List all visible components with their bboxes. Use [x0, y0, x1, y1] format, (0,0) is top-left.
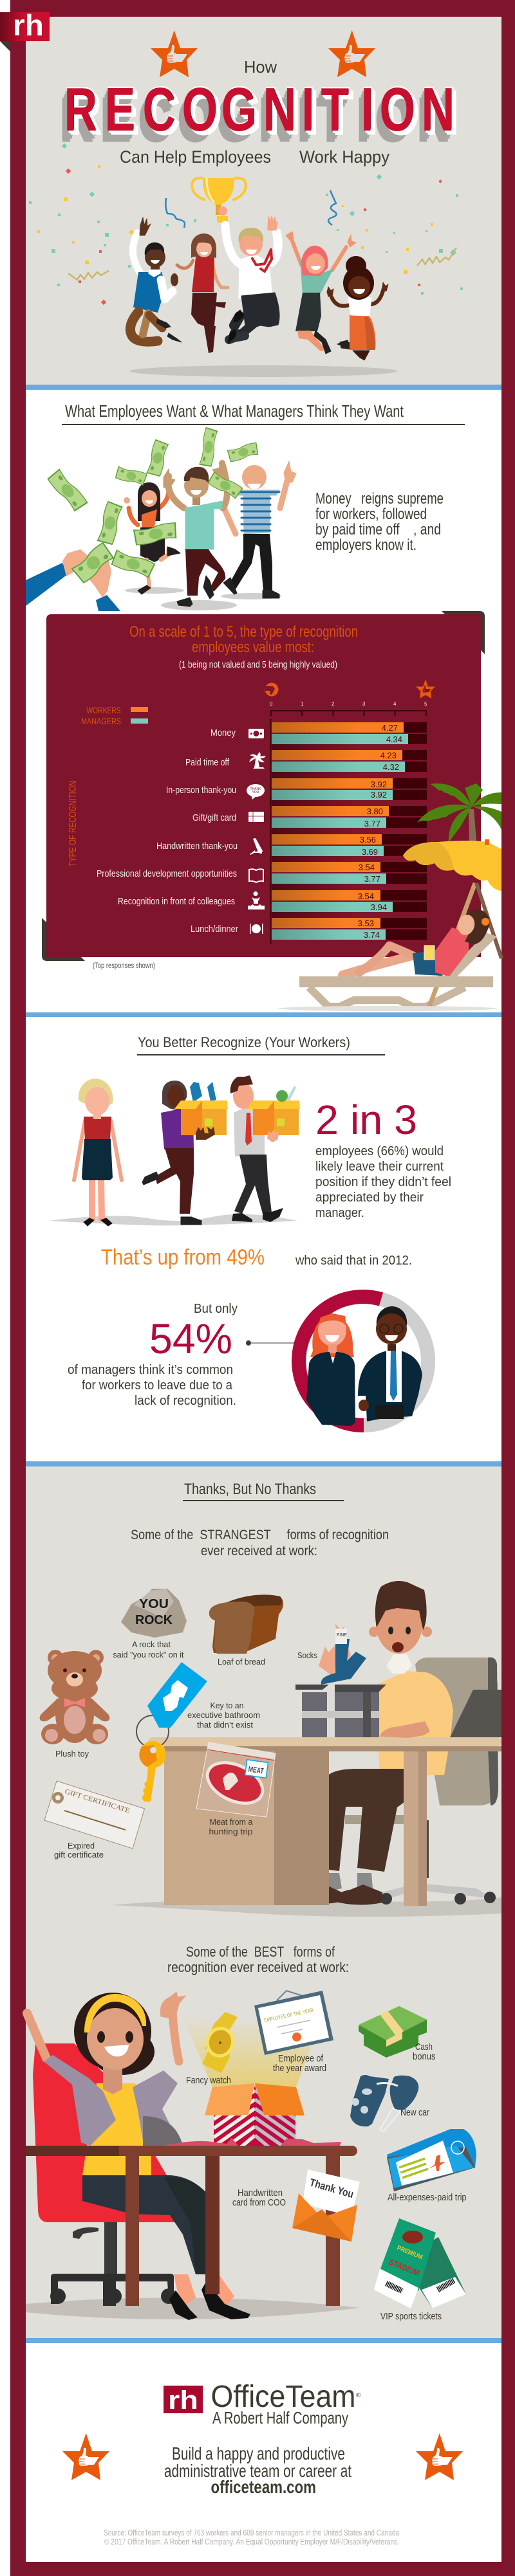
bar values: 3.54 [358, 891, 374, 901]
hands with money [26, 563, 68, 606]
body [44, 2055, 250, 2320]
caption: key [187, 1701, 260, 1730]
text: best forms intro: Some of the BEST forms of [186, 1944, 335, 1960]
caption: cash bonus: bonus [413, 2051, 435, 2062]
item: gift certificate: GIFT CERTIFICATE [64, 1787, 131, 1815]
title: Recognition: RECOGNITION [66, 77, 456, 145]
illustration: people in money rain [26, 428, 296, 611]
illustration: jumping people [129, 215, 397, 377]
raised arms [27, 1992, 185, 2061]
logo: OfficeTeam: ® [356, 2392, 361, 2399]
socks: FINE [337, 1633, 347, 1638]
icon: thank you bubble: THANK [250, 787, 261, 791]
hand at laptop [380, 1721, 430, 1738]
illustration: bored man at desk [111, 1581, 501, 1917]
source note: © 2017 OfficeTeam. A Robert Half Company. An Equal Opportunity Employer M/F/Disability/Veterans. [104, 2537, 399, 2546]
caption: bread: Loaf of bread [218, 1657, 265, 1667]
chair [33, 2043, 194, 2306]
footnote: top responses: (Top responses shown) [93, 961, 155, 970]
item: sports tickets [374, 2218, 466, 2308]
bar values: 3.74 [364, 930, 380, 940]
title: Recognition: RECOGNITION [63, 79, 453, 147]
icon: star thumbs up right [328, 30, 375, 77]
title: Recognition: RECOGNITION [60, 86, 450, 154]
icon: money [248, 729, 264, 738]
caption: cash bonus [413, 2042, 435, 2062]
icon: star thumbs up left [151, 30, 198, 77]
heading: thanks but no thanks: Thanks, But No Thanks [184, 1481, 316, 1498]
bar values: 4.27 [382, 723, 398, 733]
stat: but only 54%: lack of recognition. [135, 1394, 236, 1408]
icon: thank you bubble: YOU [252, 790, 259, 794]
ribbons [164, 2138, 341, 2146]
seated man [294, 1581, 453, 1905]
axis title: TYPE OF RECOGNITION [68, 781, 79, 866]
box man [247, 1086, 300, 1142]
item: cash bonus [359, 2006, 427, 2058]
umbrella pole [428, 883, 501, 1010]
text: call to action: Build a happy and productive [172, 2444, 345, 2463]
workers bars [272, 722, 404, 928]
caption: rock: A rock that [132, 1640, 171, 1649]
caption: employee award: Employee of [278, 2053, 324, 2064]
caption: gift certificate [54, 1841, 104, 1859]
callout: up from 49%: That’s up from 49% [101, 1245, 265, 1270]
caption: card: Handwritten [238, 2188, 283, 2198]
desk [26, 2146, 357, 2306]
title: Recognition: RECOGNITION [62, 82, 452, 151]
legend: WORKERS [86, 705, 121, 715]
bar values: 4.23 [380, 751, 397, 760]
item: sports tickets: STADIUM [388, 2257, 421, 2278]
floor shadow [111, 1897, 501, 1917]
text: best forms intro: recognition ever received at work: [167, 1959, 349, 1975]
person: woman in teal blouse [286, 232, 356, 354]
title: Recognition: RECOGNITION [65, 75, 455, 143]
woman with orange top [124, 482, 180, 594]
bars [272, 722, 427, 940]
lounger legs [309, 987, 465, 1007]
text: strangest forms intro: ever received at work: [201, 1544, 317, 1558]
caption: key: that didn’t exist [197, 1720, 253, 1730]
axis: 1 [301, 701, 304, 707]
row labels: Gift/gift card [192, 812, 236, 823]
stat: but only 54% [68, 1302, 238, 1408]
bar values [358, 723, 402, 940]
illustration: woman on sun lounger [278, 783, 501, 1011]
lounger backrest [444, 933, 497, 978]
logo: OfficeTeam [164, 2380, 361, 2427]
icon: footer star left [62, 2433, 109, 2480]
caption: plush toy: Plush toy [55, 1749, 89, 1758]
caption: key: Key to an [210, 1701, 243, 1710]
item: employee of the year certificate [254, 1991, 333, 2055]
item: teddy bear [40, 1650, 109, 1744]
caption: card [232, 2188, 286, 2208]
man in striped shirt [223, 461, 296, 598]
caption: card: card from COO [232, 2197, 286, 2208]
text: employees would leave [315, 1144, 451, 1220]
item: thank you card [292, 2170, 360, 2242]
corner tabs [42, 611, 485, 961]
legend [81, 705, 148, 726]
text: strangest forms intro: Some of the STRANGEST forms of recognition [131, 1528, 389, 1542]
axis: 0 [270, 701, 273, 707]
heading: you better recognize: You Better Recognize (Your Workers) [138, 1034, 350, 1050]
caption: employee award [273, 2053, 326, 2074]
logo: OfficeTeam: A Robert Half Company [212, 2408, 348, 2427]
text: best forms intro [167, 1944, 349, 1975]
row icons [247, 729, 266, 934]
floor shadow [26, 2297, 360, 2319]
caption: employee award: the year award [273, 2063, 326, 2074]
stat: but only 54%: of managers think it’s common [68, 1363, 233, 1377]
box woman [174, 1082, 228, 1140]
chart title: On a scale of 1 to 5, the type of recognition [129, 623, 358, 641]
bar values: 3.92 [371, 780, 387, 789]
lounger seat [299, 976, 493, 987]
bar tracks [272, 722, 427, 940]
axis [270, 701, 427, 944]
bar values: 3.77 [364, 874, 380, 884]
caption: rock: said "you rock" on it [113, 1650, 184, 1659]
person: man with trophy and tie [225, 215, 279, 343]
person: man in blue vest [130, 217, 182, 342]
text: employees would leave: manager. [315, 1206, 364, 1220]
stat: 2 in 3: 2 in 3 [315, 1097, 417, 1143]
shadows [125, 587, 281, 610]
stat: but only 54%: 54% [149, 1315, 232, 1362]
umbrella [403, 839, 501, 891]
chart title: employees value most: [192, 639, 314, 656]
text: call to action: officeteam.com [211, 2477, 316, 2497]
text: money reigns supreme: employers know it. [315, 536, 417, 554]
axis: 3 [362, 701, 366, 707]
row labels: Lunch/dinner [191, 924, 238, 935]
donut chart: 54% with managers [299, 1297, 428, 1426]
bar values: 3.94 [371, 902, 387, 912]
laptop [450, 1690, 501, 1737]
bar values: 3.80 [367, 807, 383, 816]
caption: gift certificate: gift certificate [54, 1850, 104, 1859]
caption: gift certificate: Expired [68, 1841, 95, 1850]
caption: rock [113, 1640, 184, 1659]
caption: trip: All-expenses-paid trip [388, 2192, 466, 2203]
gift box [295, 1685, 386, 1737]
caption: meat: Meat from a [210, 1817, 253, 1827]
palm tree [417, 783, 501, 848]
connector dot and line [246, 1340, 301, 1346]
text: money reigns supreme [315, 490, 444, 554]
caption: cash bonus: Cash [415, 2042, 433, 2052]
text: money reigns supreme: for workers, followed [315, 506, 427, 523]
heading: what employees want: What Employees Want & What Managers Think They Want [65, 401, 404, 421]
bar values: 4.32 [383, 762, 399, 772]
icon: pen [250, 838, 263, 855]
item: rock: ROCK [135, 1613, 173, 1627]
woman standing [74, 1079, 122, 1226]
icon: trophy [192, 178, 246, 223]
light beam [182, 2015, 311, 2087]
bar values: 3.92 [371, 790, 387, 799]
man in teal shirt [164, 462, 227, 607]
chart subtitle: (1 being not valued and 5 being highly valued) [179, 659, 337, 670]
row labels: Money [211, 727, 236, 738]
icon: book [249, 869, 263, 882]
text: employees would leave: appreciated by their [315, 1191, 424, 1205]
illustration: staff leaving with boxes [49, 1075, 300, 1226]
man manager [358, 1306, 422, 1421]
shadow under people [129, 365, 397, 377]
icon: palm [249, 752, 266, 769]
item: thank you card: Thank You [308, 2177, 355, 2200]
person: woman in red dress [177, 233, 228, 353]
item: sports tickets: PREMIUM [396, 2245, 424, 2261]
caption: key: executive bathroom [187, 1710, 260, 1720]
icon: plate and cutlery [250, 924, 263, 934]
item: rock [121, 1589, 187, 1638]
item: meat in bag: MEAT [248, 1764, 265, 1776]
caption: new car: New car [400, 2107, 429, 2118]
subtitle [120, 147, 389, 167]
flying bills [48, 428, 259, 583]
axis: 2 [332, 701, 335, 707]
man with box [230, 1075, 283, 1222]
item: travel ticket [387, 2129, 476, 2191]
icon: colleagues [248, 891, 265, 909]
item: gift certificate [44, 1781, 144, 1849]
legend: MANAGERS [81, 716, 121, 726]
logo: OfficeTeam: OfficeTeam [211, 2380, 355, 2414]
ground shadow [278, 1006, 497, 1011]
icon: thank you bubble [247, 784, 265, 799]
row shading [272, 744, 355, 918]
text: money reigns supreme: Money reigns supreme [315, 490, 444, 507]
hand right [84, 556, 111, 598]
row labels: In-person thank-you [166, 785, 236, 796]
icon: gift card [248, 812, 264, 822]
caption: meat: hunting trip [209, 1827, 252, 1836]
text: employees would leave: likely leave their current [315, 1160, 444, 1174]
row labels: Paid time off [185, 757, 230, 768]
item: fancy watch [202, 2012, 238, 2073]
text: employees would leave: position if they didn’t feel [315, 1175, 451, 1189]
sleeve [96, 595, 120, 611]
item: loaf of bread [209, 1594, 283, 1654]
axis: 5 [424, 701, 427, 707]
gift box [205, 2083, 304, 2148]
stat: but only 54%: for workers to leave due to a [82, 1378, 233, 1393]
callout: up from 49% [101, 1245, 412, 1270]
bar values: 4.34 [386, 735, 402, 744]
row labels: Handwritten thank-you [156, 841, 238, 852]
title: Recognition: RECOGNITION [64, 75, 454, 143]
item: employee of the year certificate: EMPLOYEE OF THE YEAR [263, 2007, 314, 2023]
bar values: 3.53 [358, 918, 374, 928]
caption: socks: Socks [297, 1650, 317, 1660]
axis: 4 [393, 701, 397, 707]
streamers [68, 190, 456, 280]
person: woman with hair bun [327, 256, 388, 360]
illustration: happy woman at desk [26, 1992, 360, 2320]
text: call to action [164, 2444, 351, 2497]
woman with box [142, 1081, 201, 1225]
office chair [345, 1658, 498, 1905]
caption: meat [209, 1817, 253, 1836]
item: car keys [350, 2075, 418, 2132]
woman manager [306, 1313, 355, 1426]
panel: recognition chart [42, 611, 485, 961]
icon: footer star right [416, 2433, 463, 2480]
bar values: 3.69 [362, 847, 378, 857]
item: rock: YOU [139, 1597, 169, 1611]
hand left [62, 549, 91, 576]
socks [321, 1629, 366, 1685]
bar values: 3.54 [359, 863, 375, 872]
confetti [29, 143, 463, 305]
text: money reigns supreme: by paid time off , and [315, 521, 441, 538]
row labels [97, 727, 238, 935]
icon: top star [416, 679, 435, 699]
callout: up from 49%: who said that in 2012. [295, 1254, 412, 1268]
row labels: Professional development opportunities [97, 868, 237, 879]
icon: thumbs down [265, 683, 278, 696]
row labels: Recognition in front of colleagues [118, 896, 235, 907]
source note [104, 2528, 400, 2546]
subtitle: Can Help Employees [120, 147, 271, 167]
item: meat in bag [196, 1742, 276, 1817]
ground shadow [49, 1214, 297, 1225]
caption: fancy watch: Fancy watch [186, 2075, 231, 2086]
title: How: How [244, 57, 277, 77]
text: employees would leave: employees (66%) would [315, 1144, 444, 1158]
woman [342, 909, 489, 976]
bar values: 3.56 [360, 835, 376, 845]
text: strangest forms intro [131, 1528, 389, 1558]
head [74, 1993, 154, 2094]
text: call to action: administrative team or career at [164, 2461, 351, 2481]
panel background [46, 614, 481, 957]
chart title [129, 623, 358, 656]
desk [148, 1737, 501, 1906]
item: key with tag [136, 1662, 207, 1802]
stat: but only 54%: But only [194, 1302, 238, 1316]
rh logo ribbon [0, 8, 50, 51]
managers bars [272, 734, 408, 940]
logo: OfficeTeam: rh [168, 2386, 198, 2415]
title: Recognition: RECOGNITION [68, 78, 458, 147]
caption: tickets: VIP sports tickets [380, 2311, 442, 2322]
bar values: 3.77 [364, 819, 380, 828]
source note: Source: OfficeTeam surveys of 763 workers and 609 senior managers in the United States and Canada [104, 2528, 400, 2537]
rh logo ribbon: rh [13, 8, 44, 42]
subtitle: Work Happy [299, 147, 389, 167]
